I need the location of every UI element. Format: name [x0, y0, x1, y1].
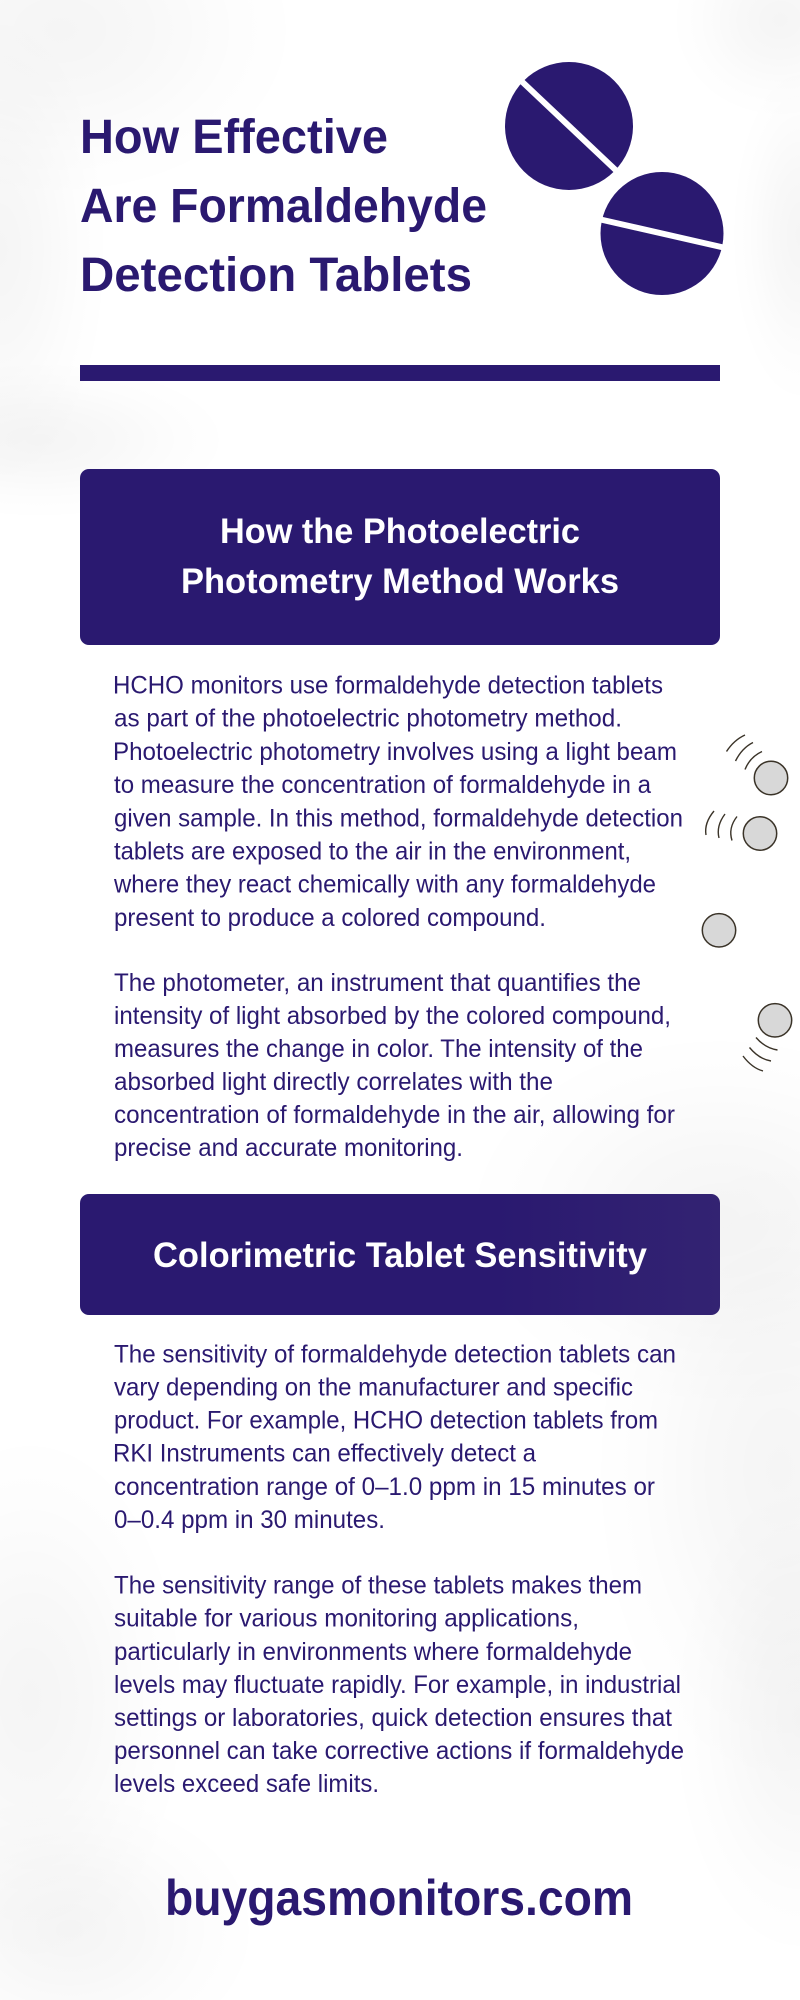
text block: photometry paragraph one: to measure the concentration of formaldehyde in a [114, 771, 651, 799]
text block: photometry paragraph one: Photoelectric photometry involves using a light beam [113, 738, 677, 766]
panel: photometry heading [80, 469, 720, 645]
text block: sensitivity paragraph two: personnel can take corrective actions if formaldehyde [114, 1737, 684, 1765]
text block: sensitivity paragraph two: suitable for various monitoring applications, [114, 1605, 579, 1633]
text block: photometry paragraph two: precise and accurate monitoring. [114, 1134, 463, 1162]
panel: sensitivity heading [80, 1194, 720, 1315]
icon: tablet one [505, 62, 633, 190]
icon: ball [702, 914, 736, 947]
icon: tablet two [594, 172, 730, 295]
text block: photometry paragraph one: HCHO monitors use formaldehyde detection tablets [113, 672, 663, 700]
text block: photometry paragraph two: concentration of formaldehyde in the air, allowing for [114, 1101, 675, 1129]
text block: photometry paragraph one: as part of the photoelectric photometry method. [114, 705, 622, 733]
text block: sensitivity paragraph one: concentration range of 0–1.0 ppm in 15 minutes or [114, 1473, 655, 1501]
text block: photometry paragraph two: measures the change in color. The intensity of the [114, 1035, 643, 1063]
text block: photometry paragraph two: intensity of light absorbed by the colored compound, [114, 1002, 671, 1030]
text block: photometry paragraph two: absorbed light directly correlates with the [114, 1068, 553, 1096]
text block: sensitivity paragraph two [114, 1572, 684, 1798]
text block: sensitivity paragraph one: RKI Instruments can effectively detect a [113, 1440, 536, 1468]
panel: photometry heading: How the Photoelectric [220, 512, 580, 551]
text block: sensitivity paragraph one: vary depending on the manufacturer and specific [114, 1374, 633, 1402]
text block: photometry paragraph one: tablets are exposed to the air in the environment, [114, 838, 631, 866]
title [80, 111, 487, 302]
text block: sensitivity paragraph two: levels exceed safe limits. [114, 1770, 379, 1798]
text block: photometry paragraph one: where they react chemically with any formaldehyde [113, 871, 656, 899]
text block: sensitivity paragraph two: levels may fluctuate rapidly. For example, in industrial [114, 1671, 681, 1699]
icon: bouncing ball with arcs left [706, 811, 777, 850]
title: Detection Tablets [80, 249, 472, 302]
text block: photometry paragraph one: given sample. In this method, formaldehyde detection [114, 804, 683, 832]
text block: sensitivity paragraph two: The sensitivity range of these tablets makes them [114, 1572, 642, 1600]
icon: bouncing ball with arcs below [743, 1004, 792, 1071]
text block: sensitivity paragraph two: settings or laboratories, quick detection ensures that [114, 1704, 672, 1732]
footer website: buygasmonitors.com [165, 1870, 633, 1926]
text block: sensitivity paragraph one: product. For example, HCHO detection tablets from [114, 1407, 658, 1435]
panel: sensitivity heading: Colorimetric Tablet Sensitivity [153, 1236, 648, 1275]
text block: photometry paragraph two: The photometer, an instrument that quantifies the [114, 969, 641, 997]
text block: sensitivity paragraph two: particularly in environments where formaldehyde [114, 1638, 632, 1666]
text block: photometry paragraph one: present to produce a colored compound. [114, 904, 546, 932]
text block: sensitivity paragraph one: The sensitivity of formaldehyde detection tablets can [114, 1341, 676, 1369]
icon: bouncing ball with arcs upper left [726, 735, 788, 795]
title: How Effective [80, 111, 388, 164]
text block: photometry paragraph one [113, 672, 683, 932]
title: Are Formaldehyde [80, 180, 487, 233]
text block: sensitivity paragraph one [113, 1341, 676, 1534]
panel: photometry heading: Photometry Method Works [181, 562, 619, 601]
header divider bar [80, 365, 720, 381]
text block: sensitivity paragraph one: 0–0.4 ppm in 30 minutes. [114, 1506, 385, 1534]
text block: photometry paragraph two [114, 969, 675, 1162]
